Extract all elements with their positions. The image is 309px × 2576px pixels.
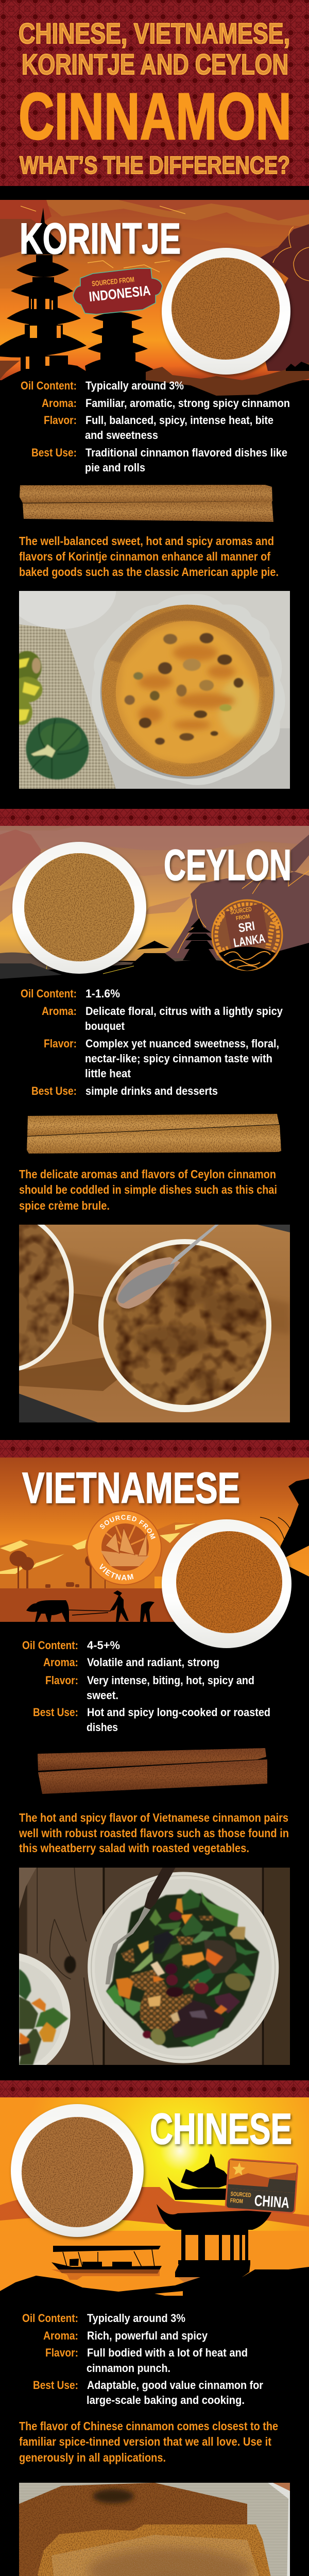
silhouette: water buffalo and plough: [26, 1590, 154, 1622]
row: best use: [31, 1084, 218, 1097]
icon: Chinese pavilion silhouette: [157, 2154, 272, 2277]
row: best use: [33, 2379, 263, 2406]
badge: sourced from China: [226, 2159, 298, 2213]
row: flavor: sweet.: [87, 1689, 118, 1702]
panel: Vietnamese scene: [0, 1458, 309, 1648]
wood table: [27, 1868, 265, 2065]
row: flavor: [45, 1674, 254, 1702]
row: best use: large-scale baking and cooking.: [87, 2394, 245, 2406]
icon: large pagoda silhouette: [0, 208, 103, 381]
yellow gourd: [19, 650, 43, 725]
badge: sourced from China: CHINA: [254, 2192, 290, 2212]
maroon clouds right: [258, 224, 309, 371]
text: Korintje description: [19, 534, 279, 579]
field: [0, 1588, 191, 1622]
photo: wheatberry salad: [19, 1868, 290, 2065]
mountains: [0, 1522, 232, 1592]
row: aroma: Volatile and radiant, strong: [87, 1656, 219, 1669]
row: flavor: [45, 2346, 248, 2375]
fork: [106, 1868, 176, 1985]
main plate: [88, 1872, 279, 2063]
badge: sourced from Sri Lanka: FROM: [235, 913, 250, 922]
icon: second pagoda silhouette: [85, 312, 160, 381]
text: Chinese description: [19, 2419, 278, 2464]
silhouette: bent worker: [140, 1601, 154, 1622]
panel: header banner: [0, 0, 309, 186]
badge: sourced from Indonesia: INDONESIA: [88, 283, 151, 304]
pie crust: [101, 605, 273, 776]
text: Vietnamese description: [19, 1811, 289, 1855]
right dish: [98, 1239, 271, 1412]
row: oil content: Typically around 3%: [85, 379, 184, 392]
badge: sourced from Sri Lanka: SOURCED: [230, 905, 252, 916]
wheat berries: [130, 1969, 192, 2032]
icon: boat silhouette: [52, 2246, 162, 2274]
row: flavor: Full, balanced, spicy, intense heat, bite: [85, 414, 273, 427]
ground: [0, 1622, 309, 1628]
row: flavor: nectar-like; spicy cinnamon taste with: [85, 1052, 272, 1065]
left dish: [19, 1225, 74, 1370]
brown hills: [0, 361, 21, 379]
row: best use: [31, 446, 287, 474]
row: aroma: Delicate floral, citrus with a lightly spicy: [85, 1005, 283, 1018]
icon: bowl of Vietnamese cinnamon: [162, 1519, 291, 1648]
icon: Ceylon cinnamon stick: [27, 1114, 281, 1154]
sky: [0, 2097, 309, 2298]
row: best use: [33, 1706, 270, 1734]
front toast: [38, 2524, 290, 2576]
cranberries: [169, 1911, 182, 1921]
sky: [0, 826, 309, 961]
row: oil content: Typically around 3%: [87, 2312, 185, 2325]
photo: creme brule: [19, 1225, 290, 1422]
row: flavor: Flavor:: [45, 1674, 78, 1687]
row: oil content: [21, 987, 120, 1000]
row: flavor: [44, 414, 273, 442]
row: best use: Best Use:: [33, 1706, 78, 1719]
badge: sourced from Indonesia: SOURCED FROM: [91, 275, 135, 288]
panel: Korintje facts: [21, 379, 290, 474]
badge: sourced from Vietnam: SOURCED FROM: [100, 1515, 156, 1539]
row: aroma: Rich, powerful and spicy: [87, 2329, 208, 2342]
scooped area with spoon: [116, 1257, 180, 1309]
row: best use: simple drinks and desserts: [85, 1084, 218, 1097]
text: Chinese description: familiar spice-tinned version that we all love. Use it: [19, 2435, 271, 2448]
row: aroma: [42, 1005, 283, 1032]
row: best use: Best Use:: [31, 446, 77, 459]
silhouette: shore: [0, 2267, 309, 2329]
text: Korintje description: flavors of Korintje cinnamon enhance all manner of: [19, 550, 270, 563]
row: flavor: Flavor:: [44, 414, 77, 427]
row: aroma: Aroma:: [43, 2329, 78, 2342]
row: oil content: Oil Content:: [22, 1639, 78, 1652]
dark red lettuce: [171, 2000, 225, 2038]
text: Korintje description: The well-balanced sweet, hot and spicy aromas and: [19, 534, 274, 548]
row: oil content: Oil Content:: [22, 2312, 78, 2325]
row: flavor: cinnamon punch.: [87, 2362, 170, 2375]
section heading: Vietnamese: VIETNAMESE: [22, 1464, 240, 1512]
photo: cinnamon sugar toast: [19, 2483, 290, 2576]
roasted squash: [205, 1948, 223, 1966]
badge: sourced from Vietnam: [87, 1510, 162, 1585]
badge: sourced from Vietnam: VIETNAM: [99, 1563, 134, 1581]
silhouette: ground and temples: [0, 918, 309, 981]
text: Ceylon description: The delicate aromas and flavors of Ceylon cinnamon: [19, 1167, 276, 1181]
icon: Korintje cinnamon stick: [20, 485, 273, 522]
reflection on water: [52, 2269, 160, 2280]
icon: bowl of Korintje cinnamon: [162, 248, 290, 375]
text: Vietnamese description: this wheatberry salad with roasted vegetables.: [19, 1841, 249, 1855]
left plate: [19, 1953, 71, 2065]
clouds: [0, 200, 309, 289]
silhouette: right bush: [258, 1479, 309, 1623]
panel: Korintje scene: [0, 200, 309, 396]
green pumpkin: [26, 718, 89, 779]
badge: sourced from Indonesia: [73, 268, 162, 314]
row: aroma: Aroma:: [43, 1656, 78, 1669]
lettuce leaves: [201, 1892, 238, 1927]
title: Korintje (pagoda behind): [0, 208, 160, 381]
row: oil content: 4-5+%: [87, 1639, 120, 1652]
sky: [0, 200, 309, 380]
row: aroma: Familiar, aromatic, strong spicy cinnamon: [85, 397, 290, 410]
text: Chinese description: generously in all applications.: [19, 2451, 166, 2464]
row: best use: Traditional cinnamon flavored dishes like: [85, 446, 287, 459]
row: oil content: [22, 2312, 185, 2325]
badge: sourced from Sri Lanka: [212, 900, 282, 971]
row: flavor: Complex yet nuanced sweetness, floral,: [85, 1037, 279, 1050]
salad base: [106, 1893, 259, 2048]
icon: bowl of Ceylon cinnamon: [12, 842, 146, 974]
vent holes: [125, 633, 243, 744]
sugar dusting: [52, 2535, 268, 2576]
distant trees: [9, 1551, 106, 1588]
photo: apple pie: [19, 591, 290, 789]
stacked side plate: [19, 591, 116, 629]
row: best use: Best Use:: [33, 2379, 78, 2392]
panel: Ceylon scene: [0, 826, 309, 981]
row: flavor: Very intense, biting, hot, spicy and: [87, 1674, 254, 1687]
row: aroma: Aroma:: [42, 397, 77, 410]
header lattice background: [0, 0, 309, 186]
mountains: [0, 2187, 309, 2228]
panel: Ceylon facts: [21, 987, 283, 1097]
row: flavor: [44, 1037, 279, 1080]
row: oil content: [22, 1639, 120, 1652]
row: best use: pie and rolls: [85, 461, 145, 474]
lattice top: [119, 624, 259, 762]
panel: Vietnamese facts: [22, 1639, 270, 1734]
clouds: [0, 826, 309, 958]
divider band: [0, 1440, 309, 1458]
badge: sourced from China: FROM: [230, 2198, 243, 2205]
section heading: Korintje: KORINTJE: [20, 214, 181, 263]
text: Ceylon description: spice crème brule.: [19, 1199, 110, 1212]
burlap cloth: [19, 624, 116, 789]
row: oil content: Oil Content:: [21, 379, 77, 392]
back toast: [19, 2483, 247, 2576]
row: flavor: and sweetness: [85, 429, 158, 442]
row: flavor: little heat: [85, 1067, 131, 1080]
badge: sourced from Sri Lanka: LANKA: [232, 931, 266, 950]
row: flavor: Flavor:: [45, 2346, 78, 2359]
row: best use: Best Use:: [31, 1084, 77, 1097]
row: flavor: Flavor:: [44, 1037, 77, 1050]
pale squash and seeds: [150, 1961, 165, 1976]
icon: Vietnamese cinnamon stick: [38, 1748, 267, 1794]
silhouette: farmer: [110, 1590, 129, 1622]
row: best use: dishes: [87, 1721, 118, 1734]
icon: bowl of Chinese cinnamon: [11, 2104, 144, 2237]
row: best use: Adaptable, good value cinnamon for: [87, 2379, 263, 2392]
text: Ceylon description: should be coddled in simple dishes such as this chai: [19, 1183, 277, 1196]
badge: sourced from Sri Lanka: SRI: [237, 919, 256, 935]
row: oil content: Oil Content:: [21, 987, 77, 1000]
brussels sprouts: [225, 1972, 251, 1992]
row: oil content: 1-1.6%: [85, 987, 120, 1000]
divider band: [0, 2080, 309, 2097]
row: aroma: Aroma:: [42, 1005, 77, 1018]
panel: Chinese facts: [22, 2312, 263, 2406]
row: flavor: Full bodied with a lot of heat and: [87, 2346, 248, 2359]
row: best use: Hot and spicy long-cooked or roasted: [87, 1706, 270, 1719]
divider band: [0, 809, 309, 826]
plate corner and table: [268, 2483, 290, 2576]
row: oil content: [21, 379, 184, 392]
pie dish: [92, 594, 285, 785]
panel: Chinese scene: [0, 2097, 309, 2329]
row: aroma: bouquet: [85, 1020, 125, 1032]
badge: sourced from China: SOURCED: [230, 2191, 251, 2199]
distant cattle: [45, 1582, 79, 1588]
text: Ceylon description: [19, 1167, 277, 1212]
sky: [0, 1458, 309, 1622]
row: aroma: [43, 2329, 208, 2342]
